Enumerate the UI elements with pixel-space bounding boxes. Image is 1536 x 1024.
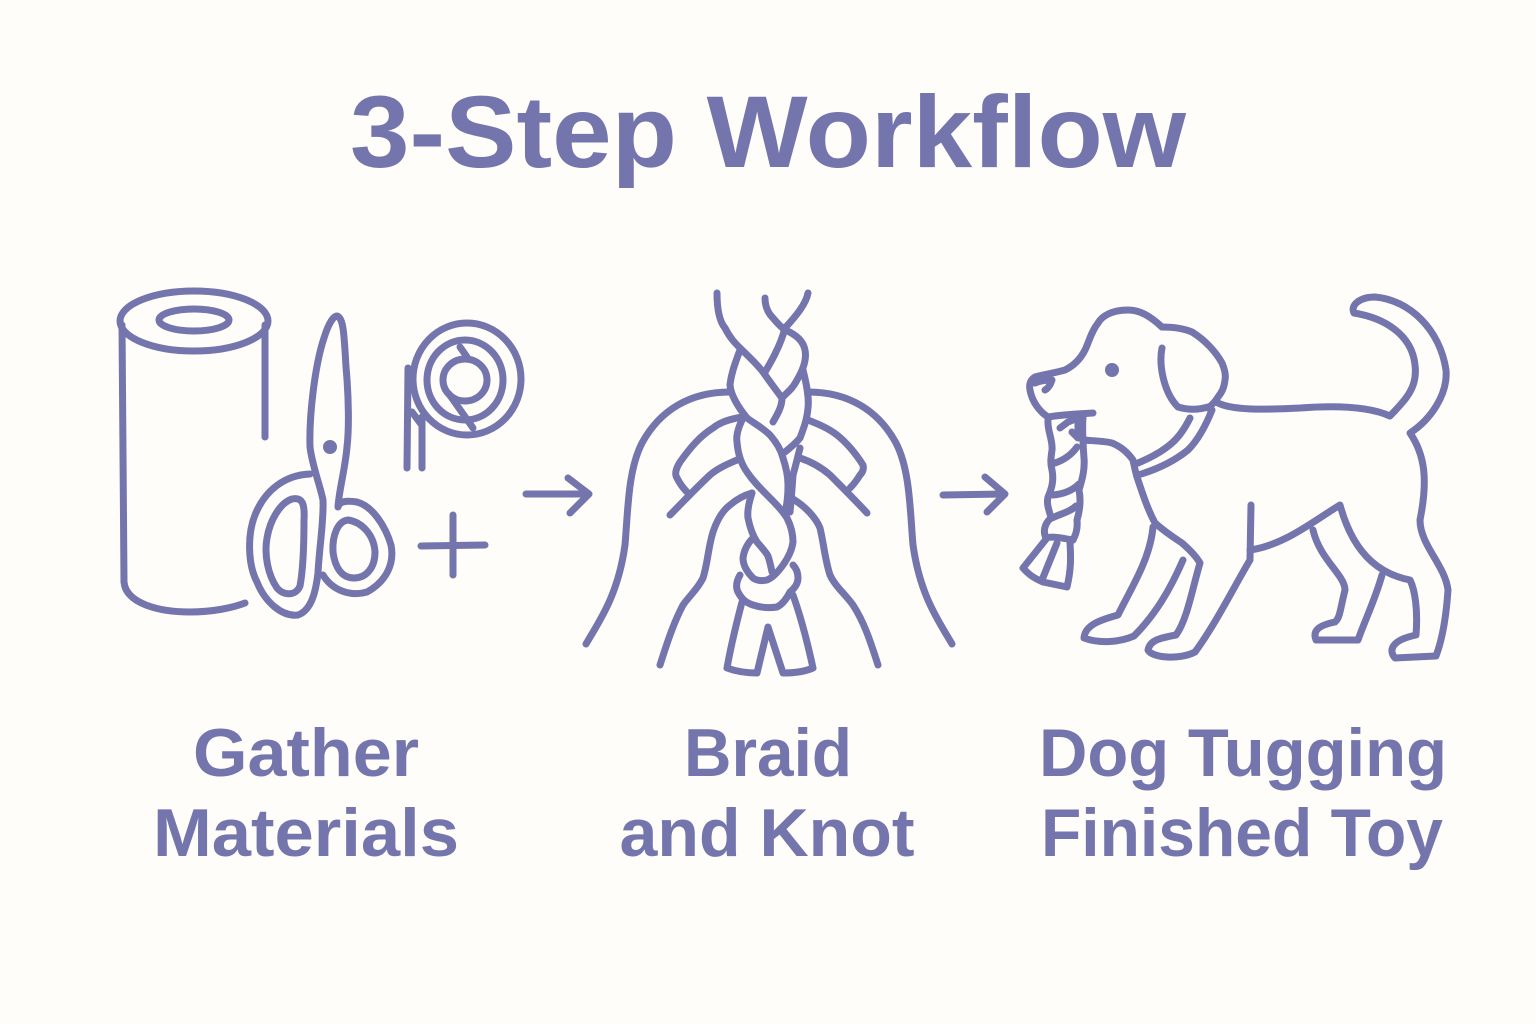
icon: scissors (250, 316, 392, 615)
label: Dog Tugging Finished Toy: Finished Toy (1041, 795, 1443, 871)
arrow: step 1 to 2 (526, 478, 589, 513)
icon: braid and knot (586, 293, 952, 673)
label: Gather Materials: Materials (153, 795, 459, 871)
icon: dog tugging rope toy (1023, 297, 1448, 658)
label: Dog Tugging Finished Toy: Dog Tugging (1039, 715, 1447, 791)
label: Braid and Knot (620, 715, 914, 871)
label: Braid and Knot: Braid (684, 715, 852, 791)
label: Braid and Knot: and Knot (620, 795, 914, 871)
icon: tape roll (407, 323, 521, 468)
label: Gather Materials (153, 715, 459, 871)
label: Gather Materials: Gather (193, 715, 419, 791)
icon: paper towel roll (120, 291, 268, 612)
arrow: step 2 to 3 (943, 477, 1005, 512)
label: Dog Tugging Finished Toy (1039, 715, 1447, 871)
icon: plus (421, 515, 485, 575)
title: 3-Step Workflow (350, 75, 1187, 189)
